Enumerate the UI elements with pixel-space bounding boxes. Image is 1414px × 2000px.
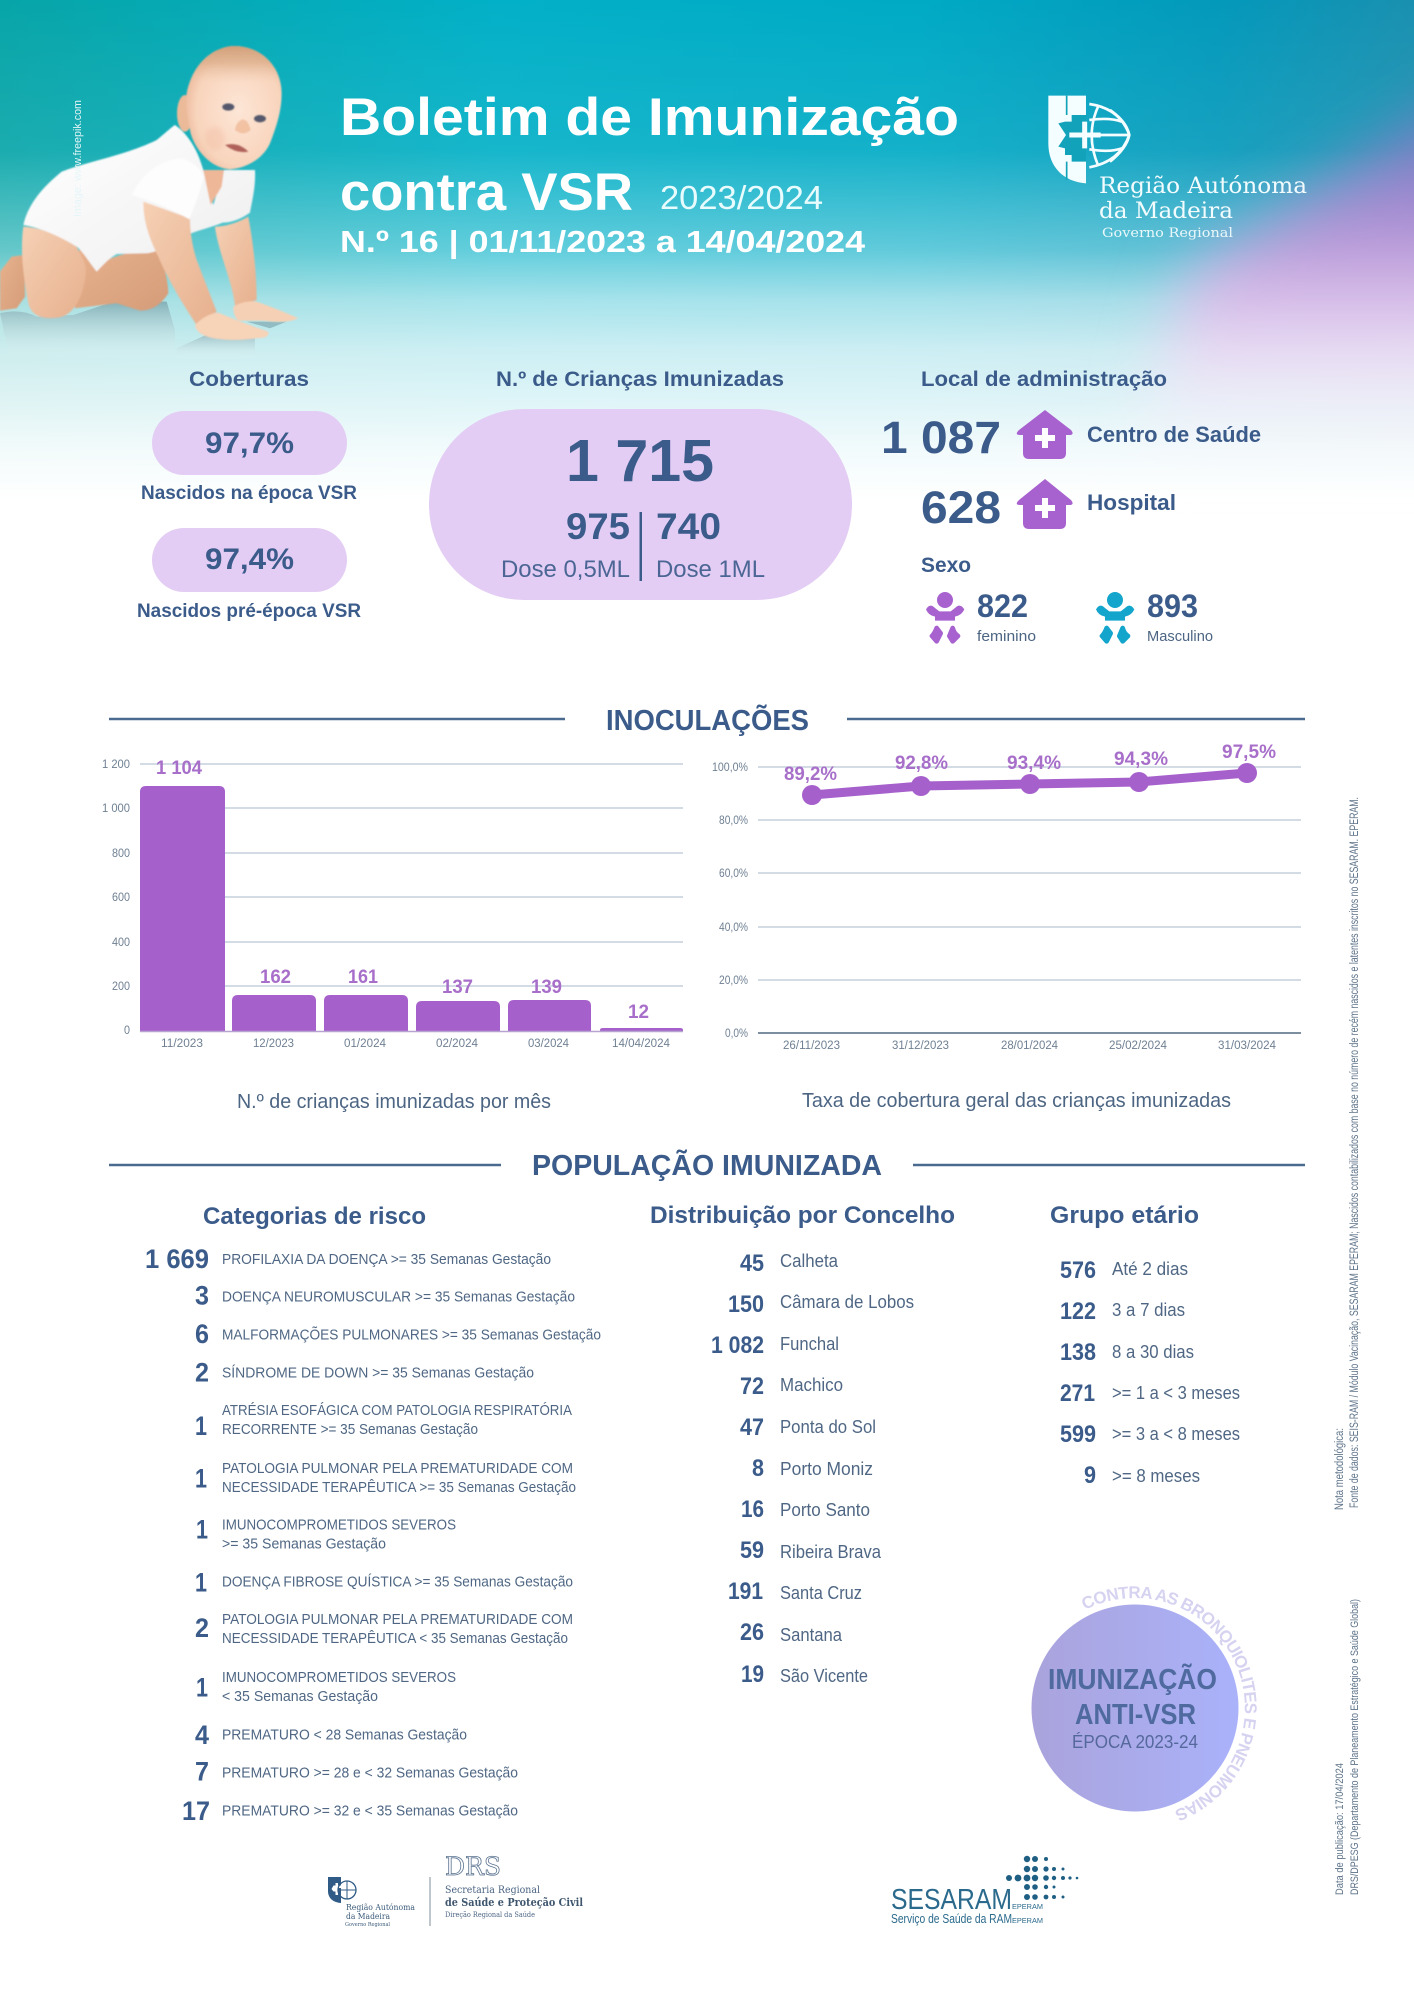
logo: SESARAM: Serviço de Saúde da RAM — [891, 1912, 1012, 1926]
title: N.º 16 | 01/11/2023 a 14/04/2024 — [340, 224, 866, 259]
icon: health centre house — [1017, 410, 1073, 459]
panel: categorias de risco: 3 — [195, 1281, 209, 1311]
badge: imunização anti-VSR: ANTI-VSR — [1075, 1699, 1196, 1731]
panel: distribuição por concelho: Funchal — [780, 1334, 839, 1354]
panel: categorias de risco: PROFILAXIA DA DOENÇA >= 35 Semanas Gestação — [222, 1252, 551, 1268]
panel: categorias de risco: IMUNOCOMPROMETIDOS SEVEROS — [222, 1670, 456, 1686]
panel: categorias de risco — [145, 1203, 601, 1826]
caption: line chart: Taxa de cobertura geral das crianças imunizadas — [802, 1090, 1231, 1112]
panel: categorias de risco: SÍNDROME DE DOWN >= 35 Semanas Gestação — [222, 1364, 534, 1381]
panel: distribuição por concelho: São Vicente — [780, 1666, 868, 1686]
panel: distribuição por concelho: Distribuição por Concelho — [650, 1202, 955, 1229]
panel: categorias de risco: IMUNOCOMPROMETIDOS SEVEROS — [222, 1518, 456, 1534]
logo: Região Autónoma da Madeira — [1048, 96, 1307, 241]
badge: imunização anti-VSR: IMUNIZAÇÃO — [1048, 1664, 1217, 1696]
panel: sexo: Sexo — [921, 554, 971, 577]
panel: categorias de risco: PATOLOGIA PULMONAR PELA PREMATURIDADE COM — [222, 1612, 573, 1628]
panel: sexo: Masculino — [1147, 629, 1213, 645]
caption: bar chart: N.º de crianças imunizadas por mês — [237, 1091, 551, 1113]
line chart: taxa de cobertura: 26/11/2023 — [783, 1040, 840, 1052]
panel: grupo etário: >= 3 a < 8 meses — [1112, 1424, 1240, 1444]
panel: distribuição por concelho: 47 — [740, 1414, 764, 1441]
panel: local de administração: Hospital — [1087, 490, 1176, 515]
line chart: taxa de cobertura: 20,0% — [719, 975, 748, 987]
panel: grupo etário — [1050, 1202, 1240, 1489]
photo credit: Image: www.freepik.com — [72, 100, 84, 217]
panel: categorias de risco: DOENÇA FIBROSE QUÍSTICA >= 35 Semanas Gestação — [222, 1573, 573, 1590]
panel: sexo: 893 — [1147, 588, 1198, 624]
panel: sexo: 822 — [977, 588, 1028, 624]
panel: categorias de risco: 1 — [196, 1672, 208, 1702]
panel: distribuição por concelho: Ponta do Sol — [780, 1417, 876, 1437]
heading: população imunizada: POPULAÇÃO IMUNIZADA — [532, 1150, 882, 1182]
panel: distribuição por concelho: 59 — [740, 1537, 764, 1564]
side note: nota metodológica: Fonte de dados: SEIS-RAM / Módulo Vacinação, SESARAM EPERAM; Nascidos contabilizados com base no número de recém nascidos e latentes inscritos no SESARAM. EPERAM. — [1349, 797, 1361, 1508]
logo: região autónoma footer: Governo Regional — [345, 1922, 390, 1928]
logo: DRS secretaria regional: de Saúde e Proteção Civil — [445, 1896, 583, 1909]
panel: categorias de risco: 1 — [195, 1567, 207, 1597]
title: 2023/2024 — [660, 179, 823, 216]
panel: grupo etário: 599 — [1060, 1421, 1096, 1448]
panel: grupo etário: Grupo etário — [1050, 1202, 1199, 1229]
logo: SESARAM — [891, 1856, 1078, 1926]
line chart: taxa de cobertura — [712, 742, 1301, 1052]
panel: coberturas: Nascidos na época VSR — [141, 483, 357, 504]
panel: distribuição por concelho: 45 — [740, 1250, 764, 1277]
panel: distribuição por concelho: 191 — [728, 1578, 763, 1605]
line chart: taxa de cobertura: 0,0% — [725, 1028, 748, 1040]
line chart: taxa de cobertura: 25/02/2024 — [1109, 1040, 1168, 1052]
bar chart: crianças imunizadas por mês: 0 — [124, 1025, 130, 1037]
bar chart: crianças imunizadas por mês: 1 104 — [156, 758, 202, 779]
icon: baby male — [1096, 592, 1134, 641]
line chart: taxa de cobertura: 93,4% — [1007, 753, 1061, 774]
panel: distribuição por concelho: Santa Cruz — [780, 1583, 862, 1603]
panel: categorias de risco: 7 — [195, 1756, 209, 1786]
panel: coberturas — [137, 368, 361, 622]
logo: Região Autónoma da Madeira: da Madeira — [1099, 199, 1233, 224]
panel: distribuição por concelho: Santana — [780, 1625, 843, 1645]
icon: baby female — [926, 592, 964, 641]
panel: categorias de risco: 2 — [195, 1613, 209, 1643]
panel: distribuição por concelho: 150 — [728, 1291, 764, 1318]
panel: distribuição por concelho: Ribeira Brava — [780, 1542, 882, 1562]
logo: SESARAM: SESARAM — [891, 1884, 1012, 1916]
panel: grupo etário: >= 1 a < 3 meses — [1112, 1383, 1240, 1403]
logo: Região Autónoma da Madeira: Governo Regional — [1102, 226, 1233, 241]
side note: nota metodológica — [1334, 797, 1361, 1510]
title: Boletim de Imunização — [340, 88, 959, 147]
panel: categorias de risco: 1 — [195, 1411, 207, 1441]
logo: DRS secretaria regional: DRS — [445, 1852, 501, 1881]
panel: distribuição por concelho: Calheta — [780, 1251, 839, 1271]
panel: coberturas: Nascidos pré-época VSR — [137, 601, 361, 622]
panel: grupo etário: 576 — [1060, 1257, 1096, 1284]
logo: região autónoma footer — [328, 1877, 415, 1928]
panel: crianças imunizadas: 740 — [656, 506, 721, 547]
side note: publicação: DRS/DPESG (Departamento de Planeamento Estratégico e Saúde Global) — [1349, 1599, 1361, 1895]
panel: categorias de risco: 6 — [195, 1319, 209, 1349]
line chart: taxa de cobertura: 28/01/2024 — [1001, 1040, 1059, 1052]
line chart: taxa de cobertura: 60,0% — [719, 868, 748, 880]
bar chart: crianças imunizadas por mês: 137 — [442, 977, 473, 998]
panel: categorias de risco: NECESSIDADE TERAPÊUTICA < 35 Semanas Gestação — [222, 1630, 568, 1647]
panel: crianças imunizadas: 975 — [566, 506, 630, 547]
panel: distribuição por concelho: 1 082 — [711, 1332, 764, 1359]
bar chart: crianças imunizadas por mês: 600 — [112, 892, 130, 904]
bar chart: crianças imunizadas por mês: 14/04/2024 — [612, 1038, 671, 1050]
panel: distribuição por concelho — [650, 1202, 955, 1688]
line chart: taxa de cobertura: 31/03/2024 — [1218, 1040, 1277, 1052]
panel: local de administração: 1 087 — [881, 412, 1001, 463]
panel: grupo etário: 122 — [1060, 1298, 1096, 1325]
line chart: taxa de cobertura: 31/12/2023 — [892, 1040, 949, 1052]
side note: nota metodológica: Nota metodológica: — [1334, 1428, 1346, 1510]
panel: categorias de risco: 2 — [195, 1357, 209, 1387]
line chart: taxa de cobertura: 89,2% — [784, 764, 837, 785]
panel: categorias de risco: PREMATURO < 28 Semanas Gestação — [222, 1728, 467, 1744]
panel: sexo — [921, 554, 1213, 645]
panel: categorias de risco: Categorias de risco — [203, 1203, 426, 1230]
line chart: taxa de cobertura: 40,0% — [719, 922, 748, 934]
badge: imunização anti-VSR: ÉPOCA 2023-24 — [1072, 1732, 1198, 1752]
panel: grupo etário: 138 — [1060, 1339, 1096, 1366]
panel: grupo etário: Até 2 dias — [1112, 1259, 1188, 1279]
panel: categorias de risco: 1 — [196, 1515, 208, 1545]
logo: Região Autónoma da Madeira: Região Autónoma — [1099, 174, 1307, 199]
side note: publicação — [1334, 1599, 1361, 1895]
bar chart: crianças imunizadas por mês: 12 — [628, 1002, 649, 1023]
panel: crianças imunizadas — [429, 368, 852, 600]
panel: distribuição por concelho: Porto Moniz — [780, 1459, 873, 1479]
logo: DRS secretaria regional — [430, 1852, 583, 1926]
panel: categorias de risco: RECORRENTE >= 35 Semanas Gestação — [222, 1422, 478, 1438]
bar chart: crianças imunizadas por mês: 11/2023 — [161, 1038, 203, 1050]
baby photo illustration — [0, 46, 298, 360]
panel: local de administração: Centro de Saúde — [1087, 422, 1261, 447]
panel: distribuição por concelho: Porto Santo — [780, 1500, 870, 1520]
panel: categorias de risco: 4 — [195, 1720, 209, 1750]
panel: grupo etário: 8 a 30 dias — [1112, 1342, 1194, 1362]
header background — [0, 0, 1414, 500]
bar chart: crianças imunizadas por mês: 200 — [112, 981, 130, 993]
panel: distribuição por concelho: Machico — [780, 1375, 843, 1395]
panel: distribuição por concelho: 19 — [741, 1661, 764, 1688]
logo: SESARAM: EPERAM — [1012, 1902, 1043, 1911]
title: contra VSR — [340, 163, 633, 222]
panel: coberturas: Coberturas — [189, 368, 309, 391]
panel: grupo etário: 271 — [1060, 1380, 1095, 1407]
panel: local de administração: Local de administração — [921, 368, 1167, 391]
panel: grupo etário: 3 a 7 dias — [1112, 1300, 1185, 1320]
panel: categorias de risco: >= 35 Semanas Gestação — [222, 1536, 386, 1552]
line chart: taxa de cobertura: 80,0% — [719, 815, 748, 827]
panel: crianças imunizadas: Dose 0,5ML — [501, 556, 630, 583]
panel: coberturas: 97,4% — [205, 543, 294, 576]
panel: coberturas: 97,7% — [205, 427, 294, 460]
panel: distribuição por concelho: Câmara de Lobos — [780, 1292, 914, 1312]
panel: grupo etário: >= 8 meses — [1112, 1466, 1200, 1486]
line chart: taxa de cobertura: 100,0% — [712, 762, 748, 774]
panel: categorias de risco: DOENÇA NEUROMUSCULAR >= 35 Semanas Gestação — [222, 1290, 575, 1306]
bar chart: crianças imunizadas por mês: 03/2024 — [528, 1038, 570, 1050]
bar chart: crianças imunizadas por mês: 139 — [531, 977, 562, 998]
panel: categorias de risco: 1 — [195, 1463, 207, 1493]
panel: categorias de risco: MALFORMAÇÕES PULMONARES >= 35 Semanas Gestação — [222, 1326, 601, 1344]
panel: categorias de risco: ATRÉSIA ESOFÁGICA COM PATOLOGIA RESPIRATÓRIA — [222, 1402, 572, 1419]
title — [340, 88, 959, 259]
panel: categorias de risco: < 35 Semanas Gestação — [222, 1689, 378, 1705]
panel: crianças imunizadas: N.º de Crianças Imunizadas — [496, 368, 784, 391]
panel: crianças imunizadas: 1 715 — [566, 428, 714, 494]
bar chart: crianças imunizadas por mês: 400 — [112, 937, 130, 949]
panel: distribuição por concelho: 8 — [752, 1455, 764, 1482]
panel: categorias de risco: 17 — [182, 1796, 210, 1826]
logo: SESARAM: EPERAM — [1012, 1916, 1043, 1925]
panel: categorias de risco: PATOLOGIA PULMONAR PELA PREMATURIDADE COM — [222, 1461, 573, 1477]
logo: DRS secretaria regional: Secretaria Regional — [445, 1884, 541, 1896]
bar chart: crianças imunizadas por mês: 800 — [112, 848, 130, 860]
badge: imunização anti-VSR: CONTRA AS BRONQUIOLITES E PNEUMONIAS — [1082, 1586, 1257, 1820]
logo: DRS secretaria regional: Direção Regional da Saúde — [445, 1911, 535, 1919]
panel: categorias de risco: NECESSIDADE TERAPÊUTICA >= 35 Semanas Gestação — [222, 1479, 576, 1496]
bar chart: crianças imunizadas por mês: 12/2023 — [253, 1038, 294, 1050]
panel: distribuição por concelho: 72 — [740, 1373, 764, 1400]
logo: região autónoma footer: Região Autónoma — [346, 1903, 415, 1912]
bar chart: crianças imunizadas por mês: 1 000 — [102, 803, 130, 815]
bar chart: crianças imunizadas por mês — [102, 758, 683, 1050]
bar chart: crianças imunizadas por mês: 162 — [260, 967, 291, 988]
panel: distribuição por concelho: 16 — [741, 1496, 764, 1523]
logo: região autónoma footer: da Madeira — [346, 1912, 390, 1921]
panel: sexo: feminino — [977, 629, 1036, 645]
panel: grupo etário: 9 — [1084, 1462, 1096, 1489]
panel: crianças imunizadas: Dose 1ML — [656, 556, 765, 583]
panel: distribuição por concelho: 26 — [740, 1619, 764, 1646]
heading: inoculações: INOCULAÇÕES — [606, 705, 809, 737]
icon: hospital house — [1017, 479, 1073, 529]
panel: categorias de risco: PREMATURO >= 32 e < 35 Semanas Gestação — [222, 1803, 518, 1819]
line chart: taxa de cobertura: 92,8% — [895, 753, 948, 774]
line chart: taxa de cobertura: 94,3% — [1114, 749, 1168, 770]
panel: local de administração — [881, 368, 1261, 533]
panel: categorias de risco: PREMATURO >= 28 e < 32 Semanas Gestação — [222, 1766, 518, 1782]
bar chart: crianças imunizadas por mês: 01/2024 — [344, 1038, 387, 1050]
side note: publicação: Data de publicação: 17/04/2024 — [1334, 1763, 1346, 1895]
panel: local de administração: 628 — [921, 482, 1001, 533]
bar chart: crianças imunizadas por mês: 1 200 — [102, 759, 130, 771]
bar chart: crianças imunizadas por mês: 161 — [348, 967, 378, 988]
line chart: taxa de cobertura: 97,5% — [1222, 742, 1276, 763]
bar chart: crianças imunizadas por mês: 02/2024 — [436, 1038, 479, 1050]
panel: categorias de risco: 1 669 — [145, 1244, 209, 1274]
